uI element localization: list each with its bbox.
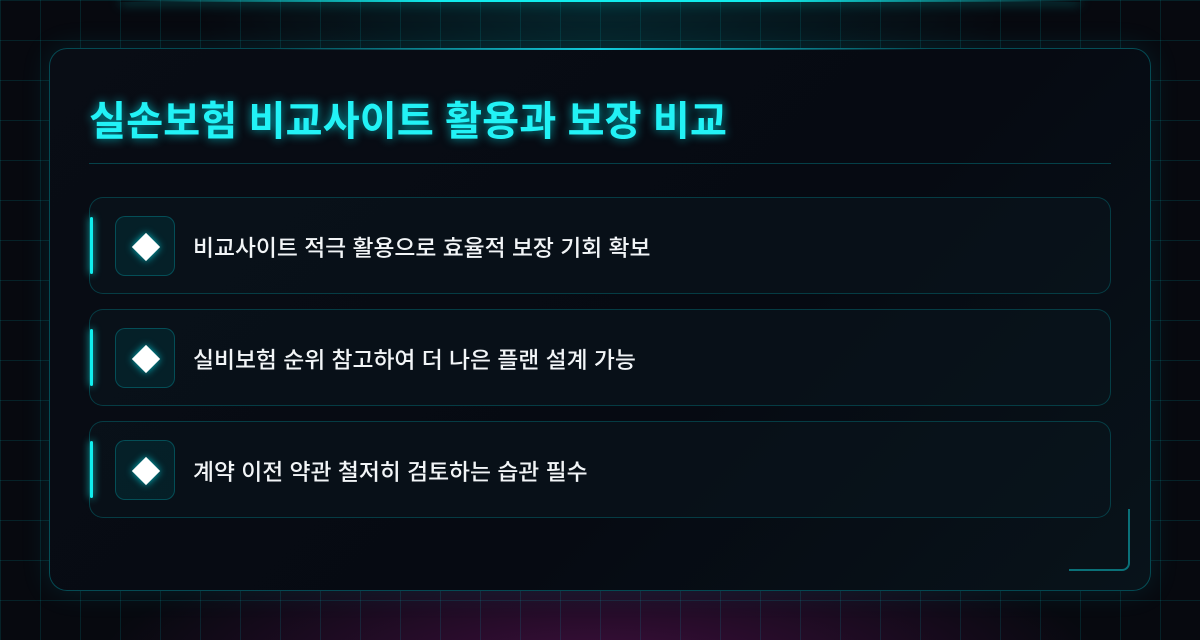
- title: 실손보험 비교사이트 활용과 보장 비교: [89, 99, 727, 144]
- item 1: [89, 197, 1111, 294]
- text 3: 계약 이전 약관 철저히 검토하는 습관 필수: [193, 459, 588, 485]
- icon: diamond: [115, 440, 175, 500]
- icon: diamond: [115, 328, 175, 388]
- text 1: 비교사이트 적극 활용으로 효율적 보장 기회 확보: [193, 235, 650, 261]
- text 2: 실비보험 순위 참고하여 더 나은 플랜 설계 가능: [193, 347, 636, 373]
- corner bracket: [1069, 509, 1130, 571]
- item 2: [89, 309, 1111, 406]
- icon: diamond: [115, 216, 175, 276]
- item 3: [89, 421, 1111, 518]
- panel: main card: [49, 48, 1151, 591]
